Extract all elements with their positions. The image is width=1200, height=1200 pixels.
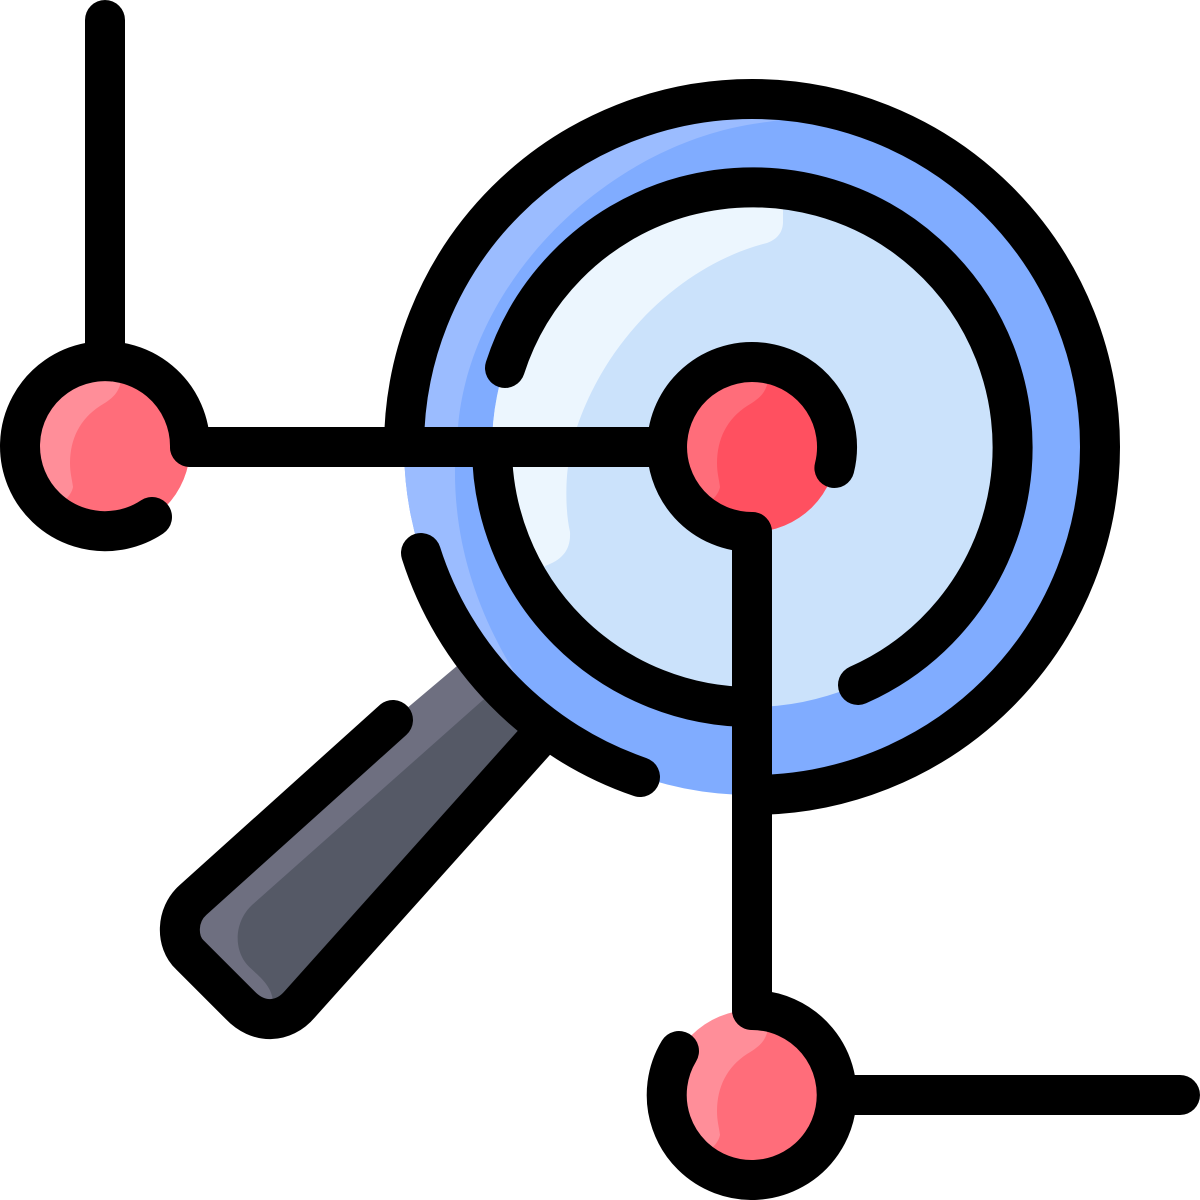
- lens outline: lower arc: [492, 447, 752, 707]
- connector: vertical from centre to bottom node: [732, 532, 772, 1010]
- bottom node outline: [667, 1010, 837, 1180]
- connector: top vertical: [85, 20, 125, 355]
- magnifier handle fill: [180, 655, 540, 1019]
- left node outline: [20, 361, 190, 531]
- magnifier lens fill: [492, 207, 993, 706]
- lens outline: upper arc: [505, 187, 1013, 685]
- centre node outline: [667, 362, 837, 532]
- rim outline: lower-left arc: [421, 553, 640, 777]
- node: centre: [687, 382, 828, 530]
- connector: right horizontal: [845, 1075, 1180, 1115]
- rim outline: main arc: [404, 99, 1100, 795]
- handle outline: [180, 720, 540, 1019]
- node: left: [40, 381, 188, 512]
- connector: horizontal to centre: [190, 427, 660, 467]
- magnifier rim fill: [404, 119, 1080, 794]
- node: bottom: [686, 1012, 817, 1160]
